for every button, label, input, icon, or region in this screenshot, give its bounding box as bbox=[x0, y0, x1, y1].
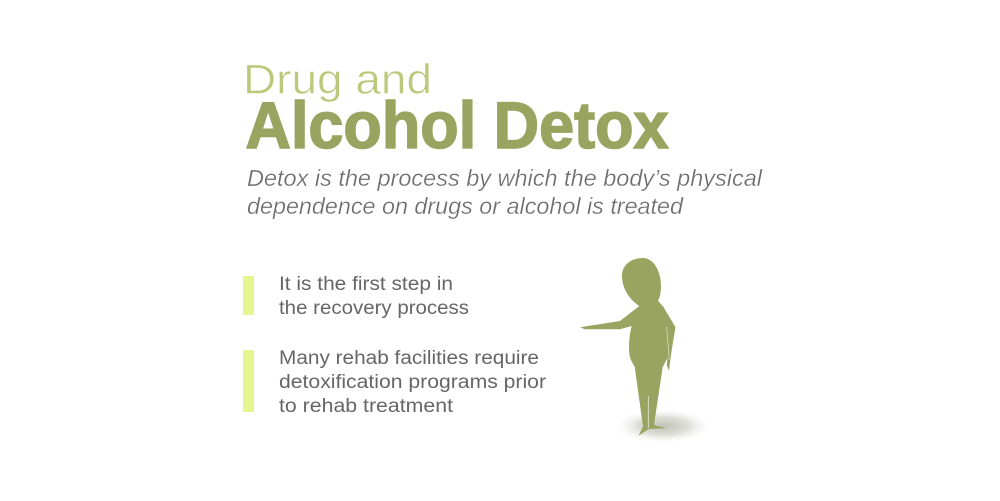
bullet text 2: detoxification programs prior bbox=[279, 372, 547, 393]
leg gap bbox=[647, 396, 649, 428]
bullet text 2 bbox=[279, 348, 547, 417]
ground shadow bbox=[612, 408, 714, 444]
bullet text 2: to rehab treatment bbox=[279, 396, 454, 417]
bullet marker 2 bbox=[243, 350, 254, 412]
icon: standing figure with outstretched arm bbox=[580, 258, 676, 436]
bullet text 1 bbox=[279, 274, 469, 319]
bullet text 1: the recovery process bbox=[279, 298, 469, 319]
bullet text 2: Many rehab facilities require bbox=[279, 348, 539, 369]
bullet marker 1 bbox=[243, 276, 254, 315]
subtitle: dependence on drugs or alcohol is treated bbox=[247, 193, 684, 219]
title bbox=[243, 56, 669, 162]
bullet text 1: It is the first step in bbox=[279, 274, 453, 295]
bullet 1 bbox=[243, 274, 469, 319]
subtitle: Detox is the process by which the body’s physical bbox=[247, 165, 763, 191]
title line: Alcohol Detox: Alcohol Detox bbox=[246, 88, 669, 162]
figure with shadow bbox=[580, 258, 714, 444]
bullet 2 bbox=[243, 348, 547, 417]
arm gap bbox=[667, 327, 669, 360]
subtitle bbox=[247, 165, 763, 219]
title line: Drug and: Drug and bbox=[243, 56, 432, 102]
